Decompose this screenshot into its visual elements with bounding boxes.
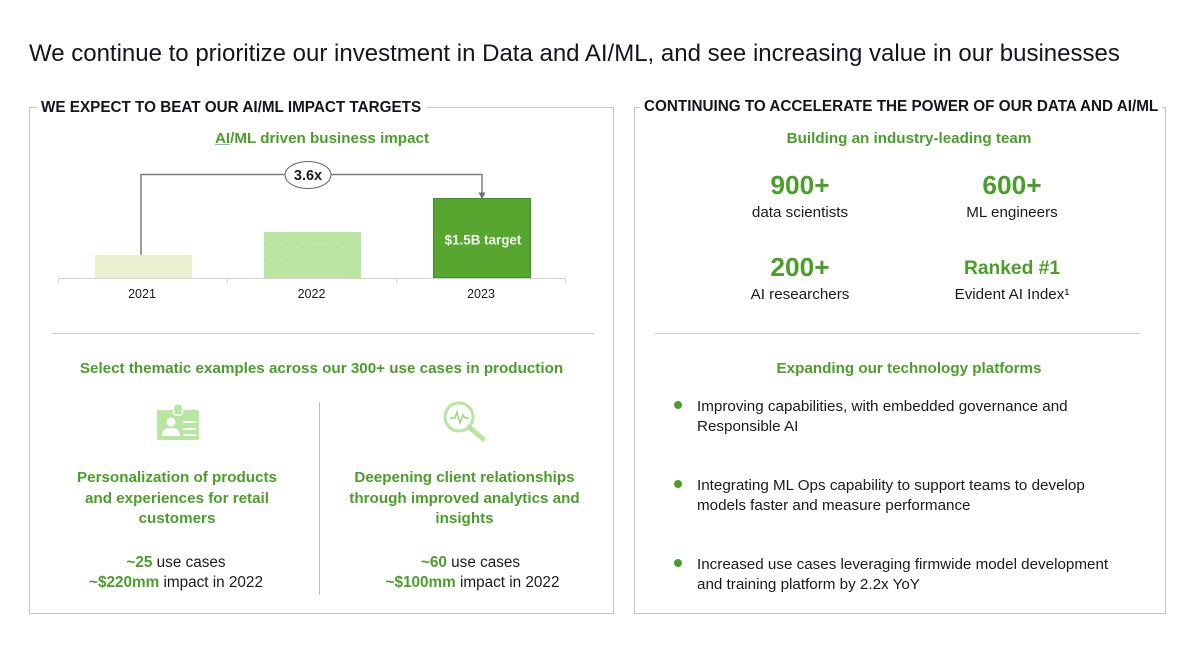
stat: ML engineers	[966, 170, 1058, 221]
bullet: ML Ops: models faster and measure performance	[697, 497, 971, 514]
axis	[58, 278, 566, 283]
bullet: capabilities	[674, 398, 1068, 435]
bar label: $1.5B target	[445, 232, 522, 248]
bar: 2021	[95, 255, 192, 278]
example: personalization	[77, 469, 277, 527]
multiplier badge: 3.6x	[294, 168, 322, 184]
bullet: use cases: and training platform by 2.2x YoY	[697, 576, 920, 593]
bullet: ML Ops	[674, 477, 1085, 514]
growth bracket arrow	[141, 174, 486, 255]
example: personalization: customers	[139, 510, 215, 527]
stat: AI researchers	[750, 252, 849, 303]
bar: 2022	[264, 232, 361, 278]
axis labels	[128, 287, 495, 301]
stat: AI researchers: AI researchers	[751, 286, 849, 303]
bullet: capabilities: Improving capabilities, with embedded governance and	[697, 398, 1068, 415]
panel: data and AI/ML power	[634, 107, 1166, 614]
stat: data scientists: 900+	[770, 170, 830, 200]
use cases heading: Select thematic examples across our 300+ use cases in production	[80, 360, 563, 377]
bar: 2023	[434, 198, 530, 278]
example: client relationship stats: ~$100mm impact in 2022	[386, 574, 559, 591]
platforms heading: Expanding our technology platforms	[777, 360, 1041, 377]
title: We continue to prioritize our investment in Data and AI/ML, and see increasing value in our businesses	[29, 40, 1120, 67]
panel heading: impact targets: WE EXPECT TO BEAT OUR AI/ML IMPACT TARGETS	[41, 99, 421, 116]
stat: Evident AI Index rank: Evident AI Index¹	[955, 286, 1069, 303]
stat: ML engineers: 600+	[982, 170, 1042, 200]
multiplier badge	[285, 162, 331, 188]
bullet: capabilities: Responsible AI	[697, 418, 798, 435]
bullet: use cases	[674, 556, 1108, 593]
example: client relationships: through improved analytics and	[349, 490, 580, 507]
example: client relationships: insights	[435, 510, 494, 527]
example: personalization stats: ~$220mm impact in 2022	[89, 574, 263, 591]
axis labels: 2021	[128, 287, 156, 301]
stat: Evident AI Index rank	[955, 258, 1070, 303]
example: personalization: Personalization of products	[77, 469, 277, 486]
example: personalization stats	[89, 554, 263, 591]
panel heading: data and AI/ML: CONTINUING TO ACCELERATE THE POWER OF OUR DATA AND AI/ML	[644, 98, 1158, 115]
example: client relationship stats: ~60 use cases	[421, 554, 520, 570]
axis labels: 2022	[298, 287, 325, 301]
stat: AI researchers: 200+	[770, 252, 830, 282]
bar chart	[58, 161, 566, 301]
example: personalization: and experiences for retail	[85, 490, 269, 507]
example: client relationship stats	[386, 554, 559, 591]
stat: Evident AI Index rank: Ranked #1	[964, 258, 1060, 279]
stat: ML engineers: ML engineers	[966, 204, 1058, 221]
example: client relationships	[349, 469, 580, 527]
example: client relationships: Deepening client relationships	[354, 469, 575, 486]
stat: data scientists: data scientists	[752, 204, 848, 221]
example: personalization stats: ~25 use cases	[126, 554, 226, 570]
team heading: Building an industry-leading team	[787, 130, 1031, 147]
panel: AI/ML impact targets	[29, 107, 614, 614]
icon: ID badge	[157, 404, 199, 440]
axis labels: 2023	[467, 287, 495, 301]
icon: analytics magnifier	[444, 402, 486, 442]
chart heading: AI/ML driven business impact	[215, 130, 429, 147]
bullet: use cases: Increased use cases leveraging firmwide model development	[697, 556, 1108, 573]
bullet: ML Ops: Integrating ML Ops capability to support teams to develop	[697, 477, 1085, 494]
stat: data scientists	[752, 170, 848, 221]
